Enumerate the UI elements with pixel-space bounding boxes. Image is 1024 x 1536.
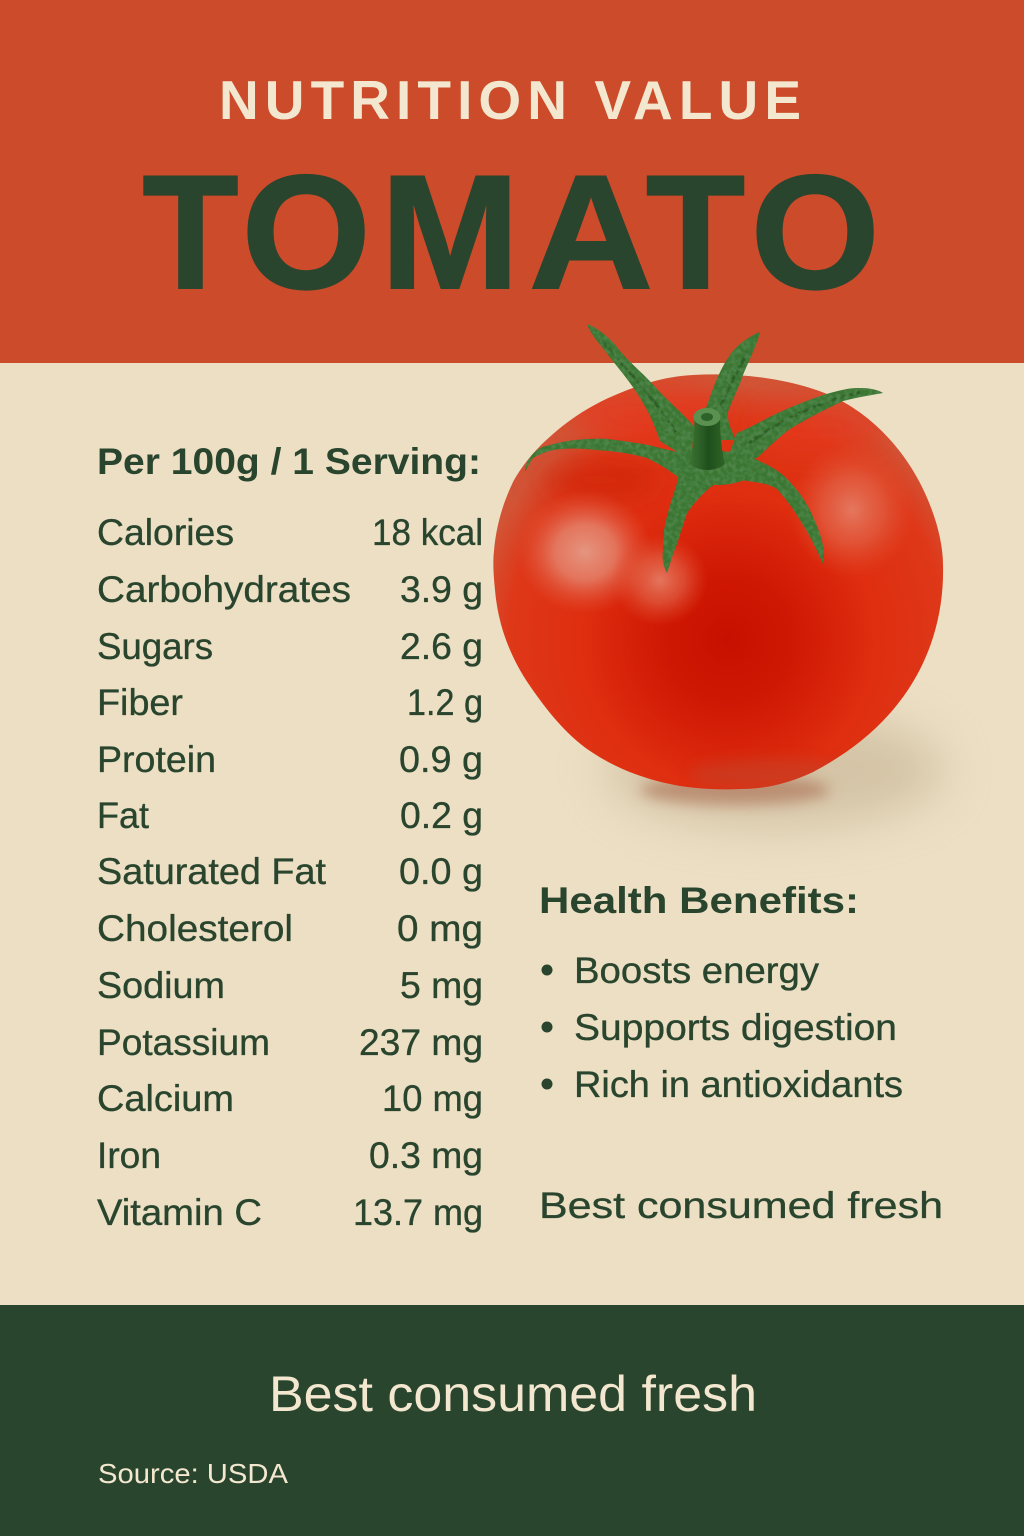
subtitle: Nutrition Value: NUTRITION VALUE xyxy=(219,69,801,131)
title: Tomato xyxy=(142,142,880,323)
row: vitamin c: Vitamin C xyxy=(97,1192,262,1233)
row: protein: 0.9 g xyxy=(399,739,483,780)
panel: health benefits xyxy=(539,880,903,1105)
row: vitamin c xyxy=(97,1192,483,1233)
benefit: rich in antioxidants: Rich in antioxidants xyxy=(574,1064,903,1105)
row: carbohydrates: Carbohydrates xyxy=(97,569,351,610)
footer tagline: Best consumed fresh xyxy=(269,1366,757,1422)
row: carbohydrates: 3.9 g xyxy=(400,569,483,610)
row: iron: 0.3 mg xyxy=(369,1135,483,1176)
row: saturated fat: Saturated Fat xyxy=(97,851,327,892)
panel: nutrition facts xyxy=(97,441,483,1233)
row: protein: Protein xyxy=(97,739,216,780)
row: sodium: 5 mg xyxy=(400,965,483,1006)
row: fat xyxy=(97,795,483,836)
row: calories: Calories xyxy=(97,512,234,553)
row: cholesterol xyxy=(97,908,483,949)
row: fiber: 1.2 g xyxy=(407,682,483,723)
nutrition heading: Per 100g / 1 Serving: xyxy=(97,441,481,482)
row: iron: Iron xyxy=(97,1135,161,1176)
title: Tomato: T xyxy=(142,142,238,323)
row: vitamin c: 13.7 mg xyxy=(353,1192,483,1233)
title: Tomato: T xyxy=(646,142,745,323)
row: saturated fat: 0.0 g xyxy=(399,851,483,892)
row: fiber: Fiber xyxy=(97,682,183,723)
row: carbohydrates xyxy=(97,569,483,610)
row: protein xyxy=(97,739,483,780)
source credit: Source: USDA xyxy=(98,1458,288,1489)
row: potassium: Potassium xyxy=(97,1022,270,1063)
row: calcium: Calcium xyxy=(97,1078,234,1119)
health benefits heading: Health Benefits: xyxy=(539,880,859,921)
benefit: boosts energy: Boosts energy xyxy=(574,950,820,991)
row: potassium: 237 mg xyxy=(359,1022,483,1063)
header band xyxy=(0,0,1024,363)
row: sodium: Sodium xyxy=(97,965,225,1006)
benefit: supports digestion: Supports digestion xyxy=(574,1007,897,1048)
row: sugars: 2.6 g xyxy=(400,626,483,667)
title: Tomato: O xyxy=(751,142,880,323)
title: Tomato: M xyxy=(380,142,520,323)
tomato body xyxy=(493,374,943,791)
row: calories: 18 kcal xyxy=(372,512,483,553)
row: potassium xyxy=(97,1022,483,1063)
note: best consumed fresh: Best consumed fresh xyxy=(539,1185,943,1226)
row: sodium xyxy=(97,965,483,1006)
row: fat: Fat xyxy=(97,795,150,836)
title: Tomato: O xyxy=(242,142,371,323)
row: cholesterol: 0 mg xyxy=(397,908,483,949)
row: calcium xyxy=(97,1078,483,1119)
row: iron xyxy=(97,1135,483,1176)
footer band xyxy=(0,1305,1024,1536)
row: fat: 0.2 g xyxy=(400,795,483,836)
tomato illustration xyxy=(493,324,945,828)
row: sugars: Sugars xyxy=(97,626,213,667)
calyx: green sepals xyxy=(525,324,883,573)
row: calcium: 10 mg xyxy=(382,1078,483,1119)
row: sugars xyxy=(97,626,483,667)
row: fiber xyxy=(97,682,483,723)
row: cholesterol: Cholesterol xyxy=(97,908,293,949)
title: Tomato: A xyxy=(529,142,653,323)
row: saturated fat xyxy=(97,851,483,892)
tomato cast shadow xyxy=(605,712,945,828)
calyx: central stem xyxy=(689,408,725,470)
row: calories xyxy=(97,512,483,553)
